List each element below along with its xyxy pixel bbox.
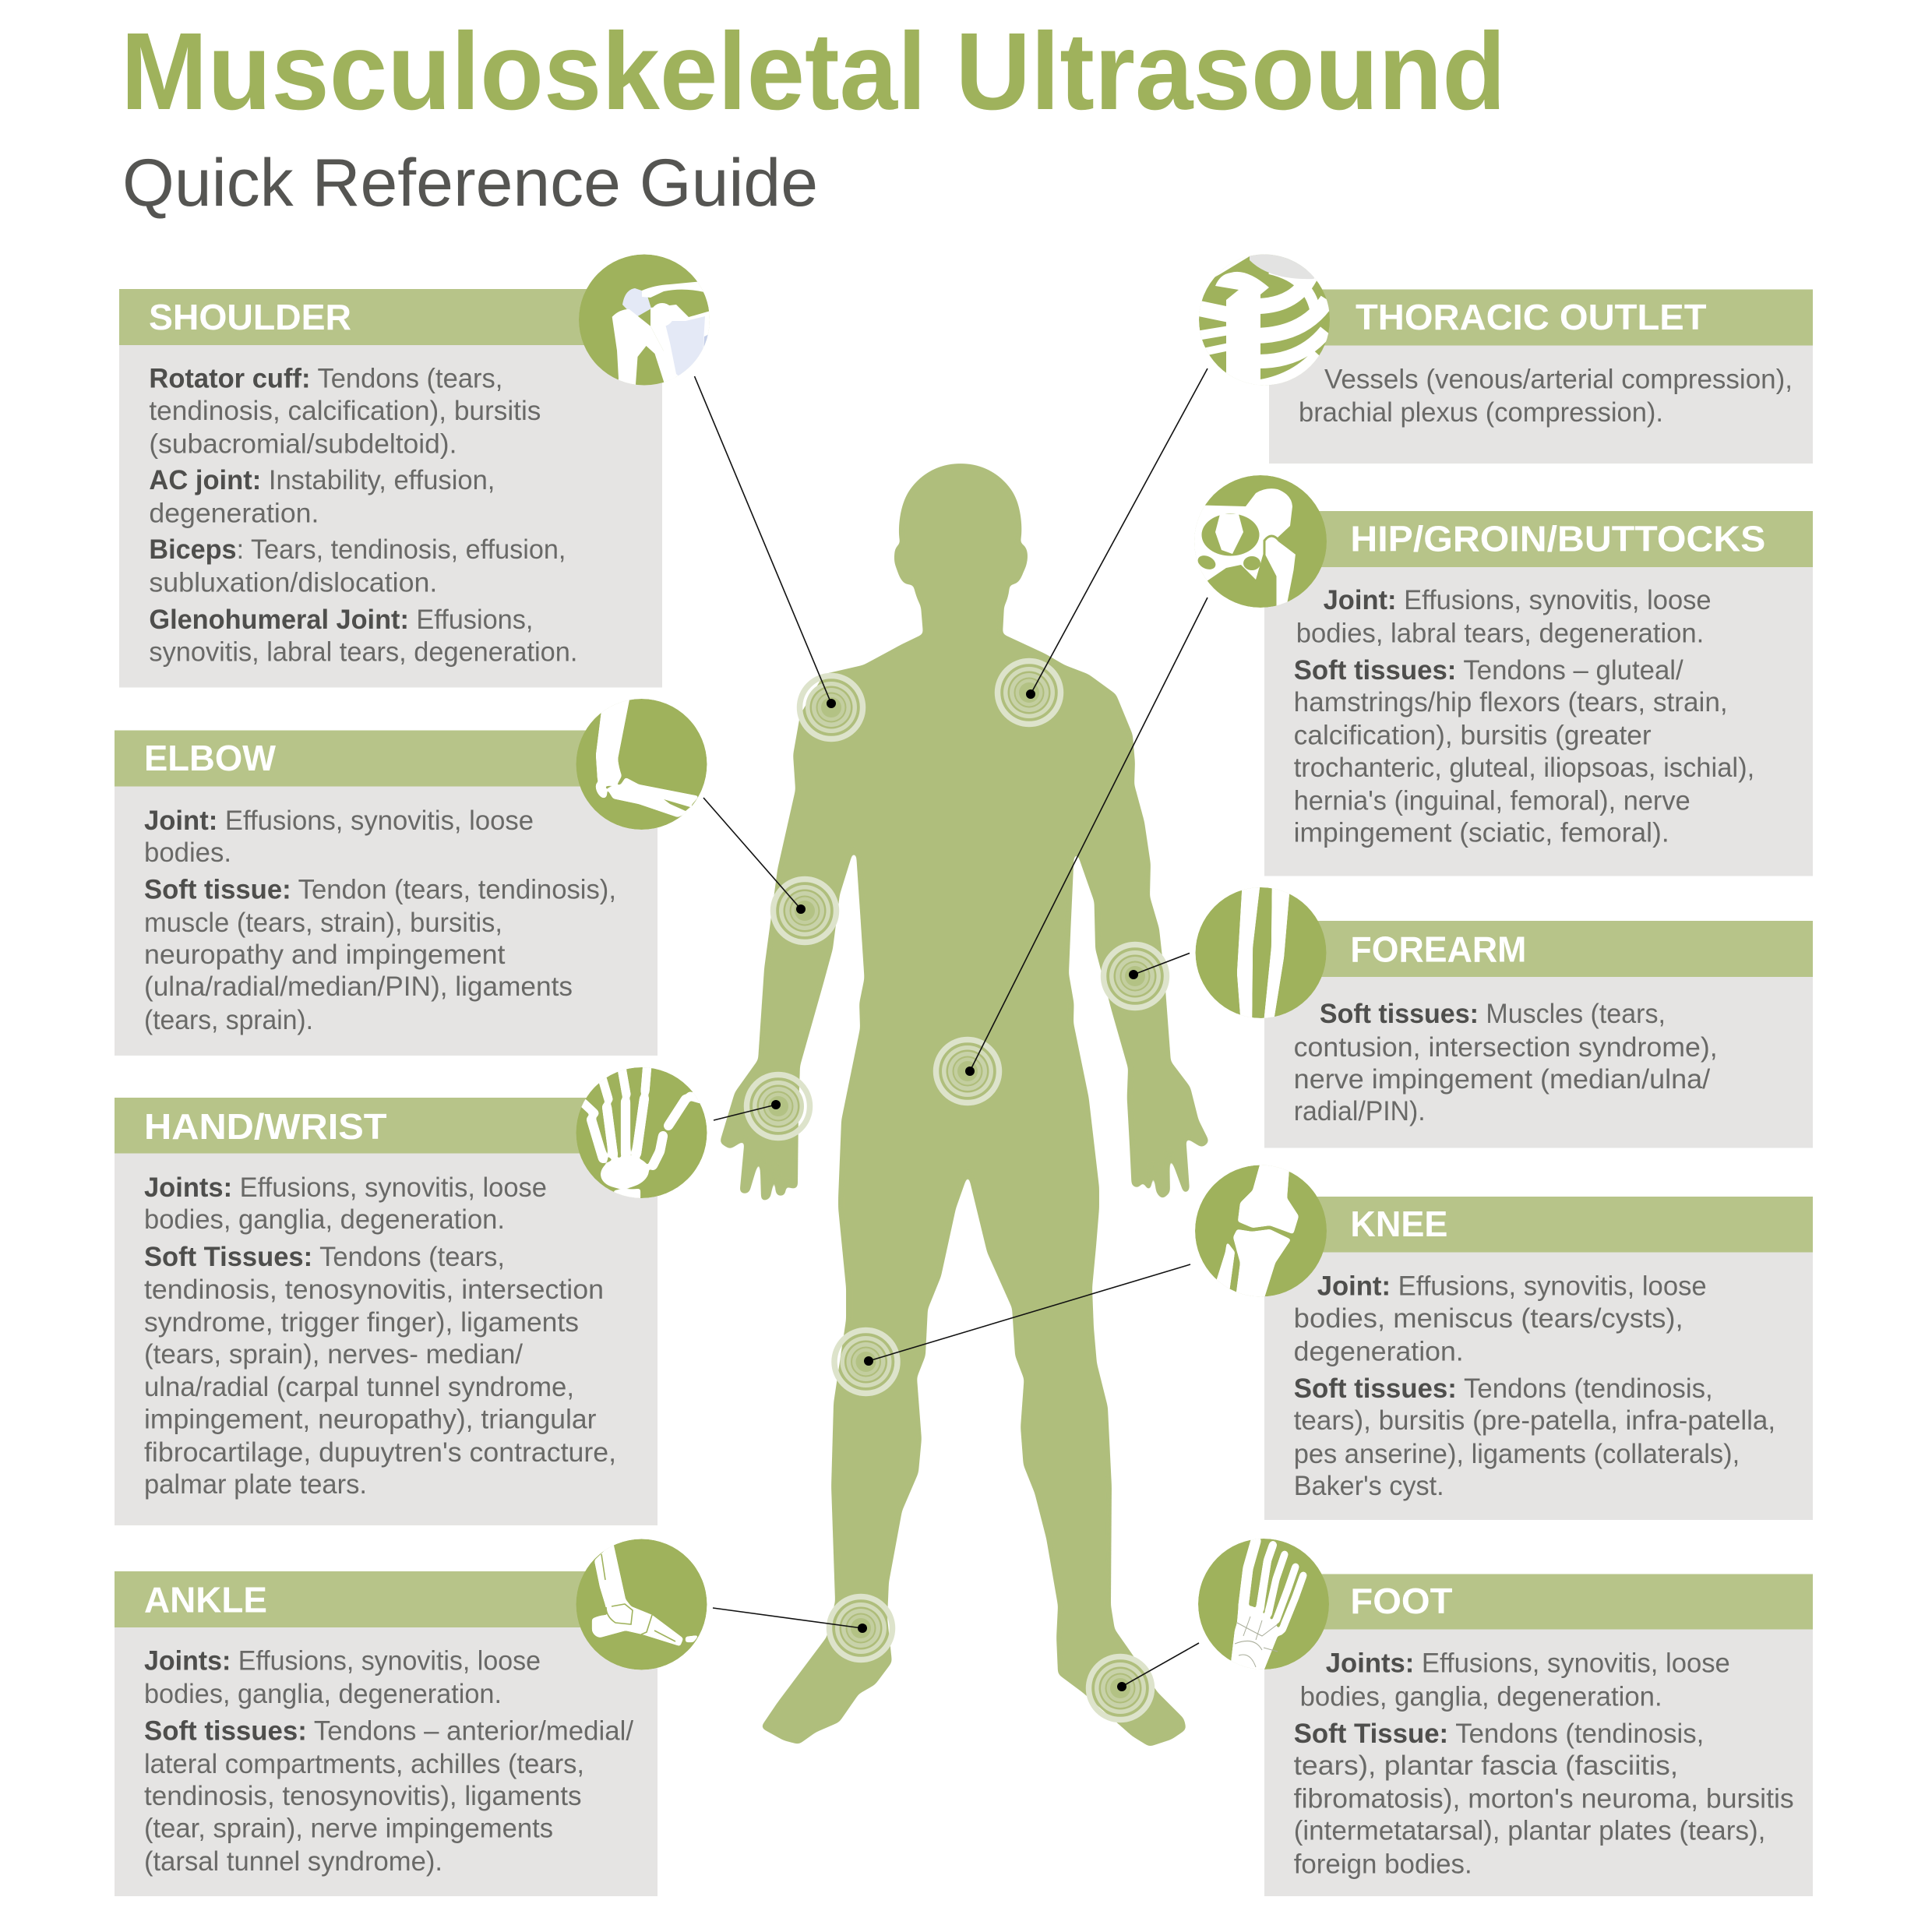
panel: hand/wrist — [115, 1098, 658, 1525]
pointer: knee — [864, 1264, 1190, 1366]
ankle body text: (tear, sprain), nerve impingements — [144, 1814, 553, 1843]
panel: knee — [1264, 1197, 1813, 1520]
elbow body text: (ulna/radial/median/PIN), ligaments — [144, 971, 573, 1002]
hand/wrist body text — [144, 1172, 616, 1500]
shoulder body text: AC joint: Instability, effusion, — [149, 465, 495, 495]
panel: forearm — [1264, 921, 1813, 1148]
hip body text: trochanteric, gluteal, iliopsoas, ischial), — [1294, 753, 1754, 783]
forearm heading: FOREARM — [1350, 929, 1526, 969]
ankle body text: Soft tissues: Tendons – anterior/medial/ — [144, 1715, 633, 1747]
hip body text: Joint: Effusions, synovitis, loose — [1324, 585, 1712, 615]
elbow body text: bodies. — [144, 837, 231, 868]
foot body text — [1294, 1648, 1794, 1879]
pointer: foot — [1117, 1643, 1199, 1691]
hip body text: hernia's (inguinal, femoral), nerve — [1294, 785, 1690, 816]
foot heading: FOOT — [1350, 1581, 1452, 1621]
foot body text: tears), plantar fascia (fasciitis, — [1294, 1751, 1678, 1781]
forearm header bar — [1264, 921, 1813, 977]
hand/wrist body text: palmar plate tears. — [144, 1469, 367, 1500]
foot body text: bodies, ganglia, degeneration. — [1300, 1681, 1662, 1712]
panel: hip/groin/buttocks — [1264, 511, 1813, 876]
shoulder body text: Rotator cuff: Tendons (tears, — [149, 364, 502, 394]
ring: hip — [936, 1039, 999, 1103]
icon: hand bones — [576, 1063, 707, 1200]
target rings and pointer lines — [695, 368, 1208, 1720]
hip body text: calcification), bursitis (greater — [1294, 721, 1652, 751]
hand/wrist body text: syndrome, trigger finger), ligaments — [144, 1307, 579, 1338]
knee body text: tears), bursitis (pre-patella, infra-patella, — [1294, 1405, 1775, 1436]
panel: shoulder — [119, 289, 662, 687]
panel: ankle — [115, 1571, 658, 1896]
ring: forearm — [1103, 944, 1167, 1008]
pointer: hip — [965, 598, 1208, 1076]
foot body text: fibromatosis), morton's neuroma, bursitis — [1294, 1784, 1794, 1814]
ring: ankle — [829, 1597, 893, 1659]
foot body text: foreign bodies. — [1294, 1849, 1472, 1879]
pointer: shoulder — [695, 376, 836, 708]
ring: foot — [1089, 1656, 1151, 1720]
knee body text: Soft tissues: Tendons (tendinosis, — [1294, 1373, 1713, 1404]
ring: shoulder — [799, 676, 863, 739]
ankle header bar — [115, 1571, 658, 1627]
ankle body text: tendinosis, tenosynovitis), ligaments — [144, 1781, 581, 1811]
hand/wrist header bar — [115, 1098, 658, 1153]
forearm body text: contusion, intersection syndrome), — [1294, 1032, 1718, 1063]
icon: thoracic ribs — [1199, 254, 1330, 385]
elbow body text: Joint: Effusions, synovitis, loose — [144, 806, 534, 836]
knee body text: degeneration. — [1294, 1337, 1464, 1366]
hip body text: impingement (sciatic, femoral). — [1294, 818, 1669, 848]
title: Musculoskeletal Ultrasound — [121, 9, 1506, 132]
hip body text: hamstrings/hip flexors (tears, strain, — [1294, 687, 1728, 717]
panel: foot — [1264, 1574, 1813, 1896]
knee heading: KNEE — [1350, 1204, 1447, 1244]
ring: elbow — [773, 879, 837, 943]
panel: thoracic outlet — [1269, 290, 1813, 464]
forearm body text: nerve impingement (median/ulna/ — [1294, 1064, 1710, 1095]
hand/wrist heading: HAND/WRIST — [144, 1106, 387, 1147]
elbow body text: Soft tissue: Tendon (tears, tendinosis), — [144, 874, 616, 904]
foot body text: Joints: Effusions, synovitis, loose — [1326, 1648, 1730, 1679]
forearm body text — [1294, 999, 1718, 1126]
hip header bar — [1264, 511, 1813, 567]
icon: hip bones — [1188, 475, 1327, 612]
shoulder body text: subluxation/dislocation. — [149, 567, 437, 598]
icon: knee bones — [1195, 1165, 1327, 1296]
pointer: thoracic outlet — [1026, 368, 1208, 699]
icon: foot bones — [1198, 1539, 1329, 1675]
elbow heading: ELBOW — [144, 738, 277, 778]
hand/wrist body text: tendinosis, tenosynovitis, intersection — [144, 1275, 604, 1305]
pointer: wrist — [714, 1100, 781, 1120]
thoracic outlet body text: brachial plexus (compression). — [1299, 397, 1663, 428]
hand/wrist body text: (tears, sprain), nerves- median/ — [144, 1339, 523, 1370]
hip body text: Soft tissues: Tendons – gluteal/ — [1294, 655, 1683, 686]
elbow body text: muscle (tears, strain), bursitis, — [144, 908, 502, 938]
hand/wrist body text: Joints: Effusions, synovitis, loose — [144, 1172, 547, 1203]
thoracic outlet heading: THORACIC OUTLET — [1356, 297, 1706, 337]
ankle body text: (tarsal tunnel syndrome). — [144, 1846, 442, 1877]
elbow body text — [144, 806, 616, 1035]
ankle body text — [144, 1645, 633, 1877]
shoulder body text: degeneration. — [149, 499, 319, 528]
shoulder body text: Biceps: Tears, tendinosis, effusion, — [149, 534, 566, 565]
panel: elbow — [115, 731, 658, 1056]
foot body text: (intermetatarsal), plantar plates (tears), — [1294, 1816, 1765, 1846]
pointer: elbow — [703, 798, 806, 914]
hand/wrist body text: impingement, neuropathy), triangular — [144, 1404, 597, 1435]
elbow header bar — [115, 731, 658, 787]
elbow body text: neuropathy and impingement — [144, 940, 506, 970]
hand/wrist body text: bodies, ganglia, degeneration. — [144, 1204, 505, 1235]
ring: wrist — [746, 1075, 810, 1137]
ankle body text: Joints: Effusions, synovitis, loose — [144, 1645, 541, 1676]
foot header bar — [1264, 1574, 1813, 1630]
knee body text: pes anserine), ligaments (collaterals), — [1294, 1439, 1740, 1469]
hand/wrist body text: fibrocartilage, dupuytren's contracture, — [144, 1437, 616, 1468]
thoracic outlet body text — [1299, 365, 1793, 428]
icon: elbow bones — [576, 695, 707, 830]
shoulder body text: Glenohumeral Joint: Effusions, — [149, 605, 533, 635]
hip body text — [1294, 585, 1754, 848]
foot body text: Soft Tissue: Tendons (tendinosis, — [1294, 1719, 1704, 1749]
shoulder body text: tendinosis, calcification), bursitis — [149, 396, 541, 426]
knee header bar — [1264, 1197, 1813, 1253]
hip body text: bodies, labral tears, degeneration. — [1296, 619, 1704, 648]
forearm body text: radial/PIN). — [1294, 1096, 1426, 1126]
ankle heading: ANKLE — [144, 1580, 267, 1620]
shoulder body text — [149, 364, 577, 667]
shoulder body text: (subacromial/subdeltoid). — [149, 428, 457, 460]
hand/wrist body text: ulna/radial (carpal tunnel syndrome, — [144, 1372, 574, 1402]
icon: ankle bones — [576, 1539, 707, 1670]
pointer: forearm — [1129, 954, 1190, 979]
knee body text: Joint: Effusions, synovitis, loose — [1317, 1271, 1707, 1302]
subtitle: Quick Reference Guide — [122, 146, 818, 220]
hand/wrist body text: Soft Tissues: Tendons (tears, — [144, 1242, 505, 1272]
elbow body text: (tears, sprain). — [144, 1005, 313, 1035]
knee body text: Baker's cyst. — [1294, 1471, 1444, 1501]
knee body text — [1294, 1271, 1775, 1501]
knee body text: bodies, meniscus (tears/cysts), — [1294, 1303, 1683, 1334]
forearm body text: Soft tissues: Muscles (tears, — [1320, 999, 1666, 1029]
thoracic outlet body text: Vessels (venous/arterial compression), — [1324, 365, 1793, 395]
shoulder header bar — [119, 289, 662, 345]
ring: thoracic outlet — [997, 661, 1061, 725]
pointer: ankle — [713, 1608, 867, 1633]
shoulder heading: SHOULDER — [149, 297, 351, 337]
ring: knee — [834, 1331, 897, 1393]
shoulder body text: synovitis, labral tears, degeneration. — [149, 637, 577, 667]
body silhouette — [721, 465, 1208, 1745]
icon: forearm bones — [1195, 880, 1326, 1024]
hip heading: HIP/GROIN/BUTTOCKS — [1350, 519, 1765, 559]
ankle body text: lateral compartments, achilles (tears, — [144, 1749, 584, 1779]
thoracic outlet header bar — [1269, 290, 1813, 346]
ankle body text: bodies, ganglia, degeneration. — [144, 1679, 502, 1709]
icon: shoulder bones — [579, 254, 710, 390]
